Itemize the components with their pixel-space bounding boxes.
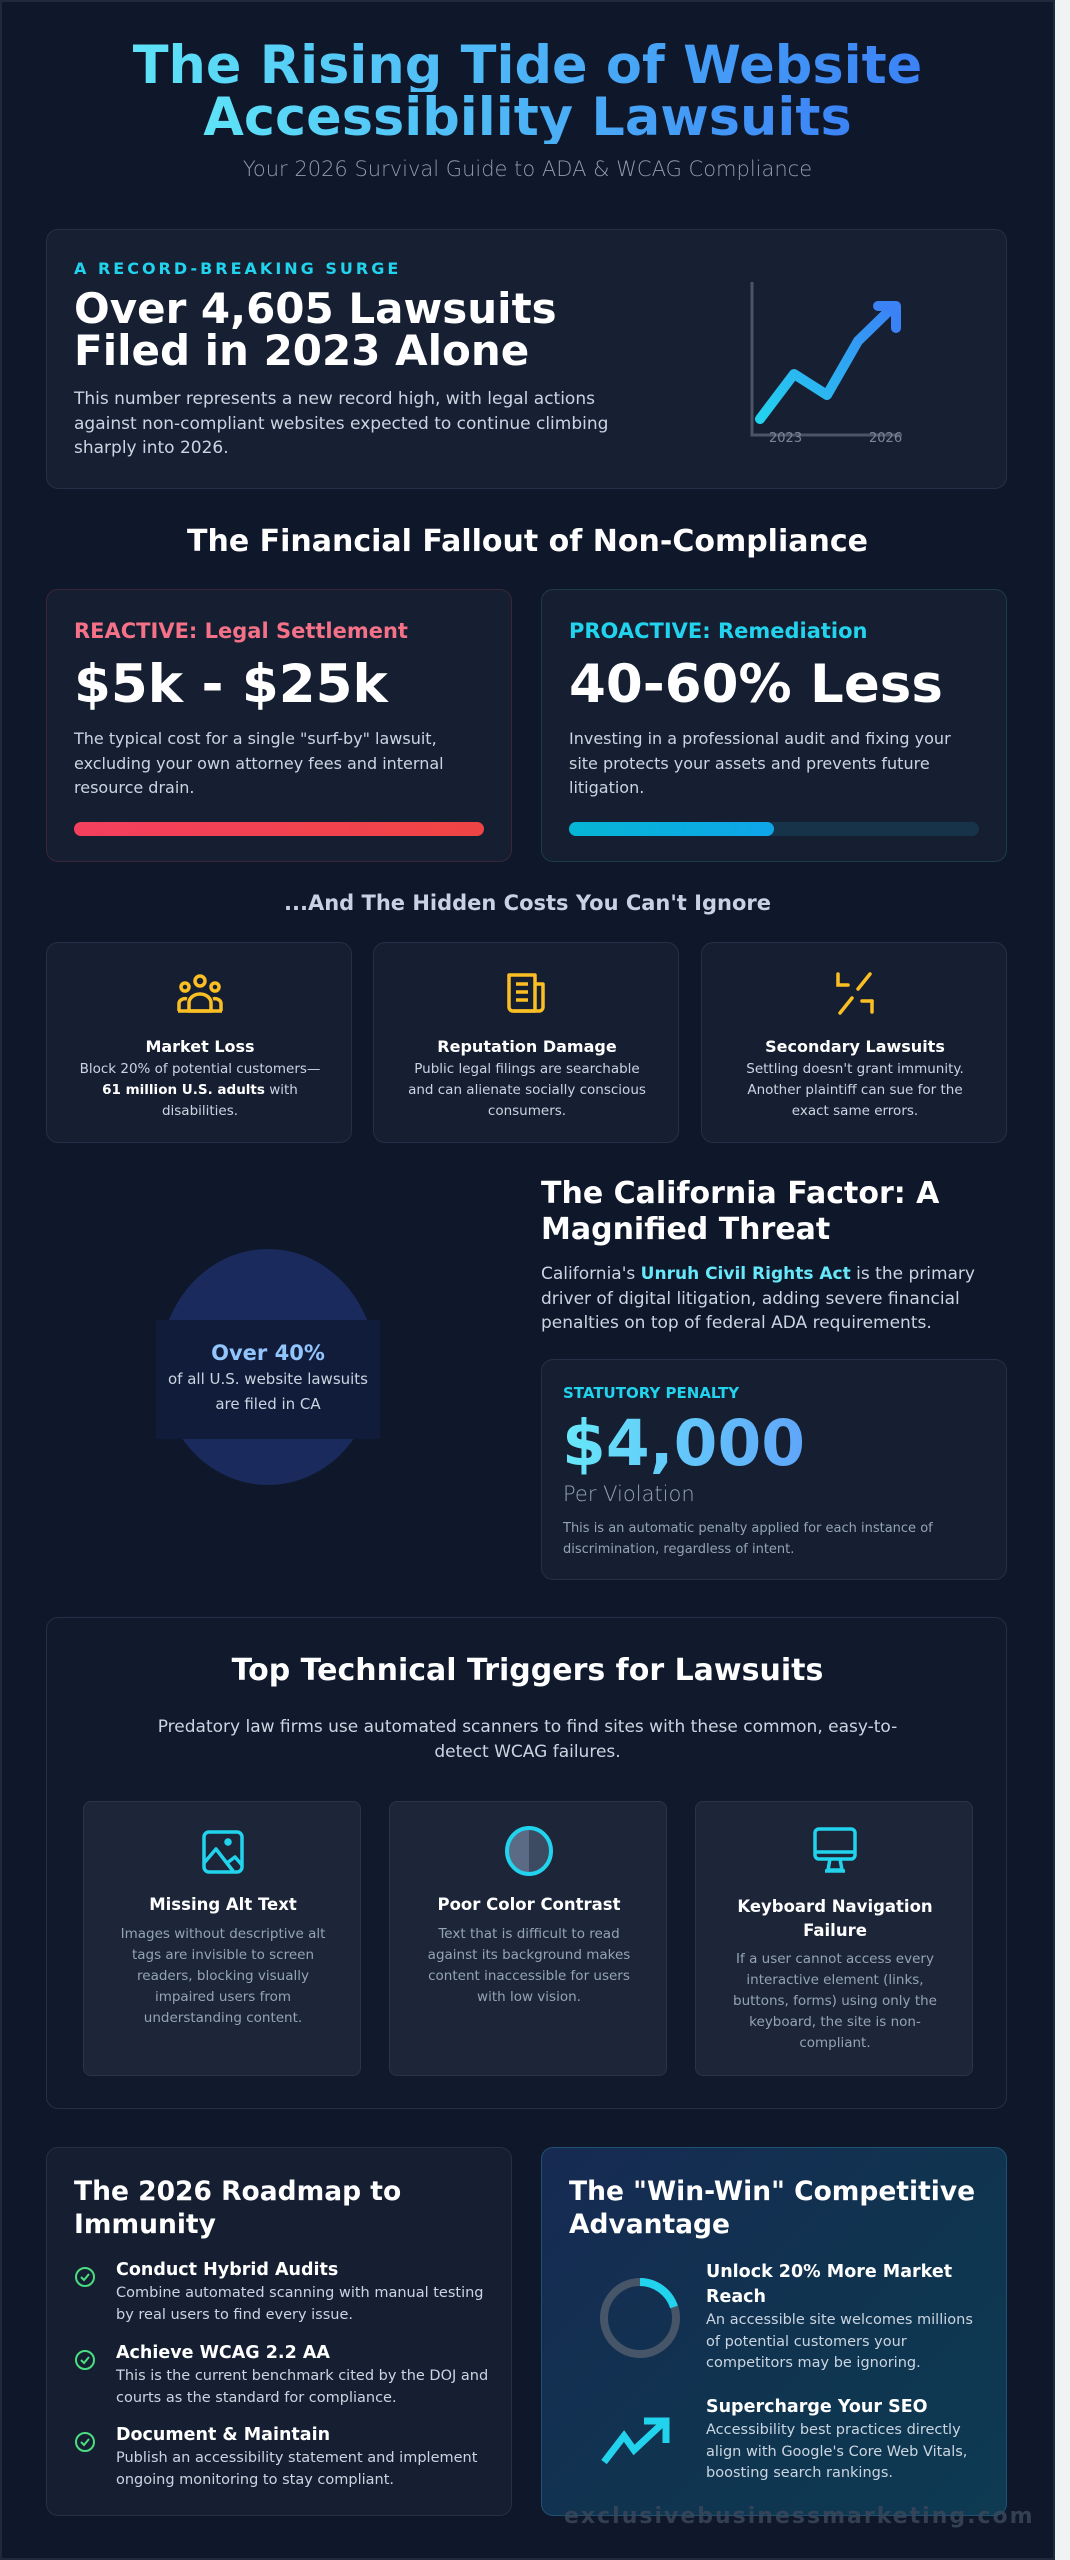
panel: reputation damage	[373, 942, 679, 1143]
text: alt desc: Images without descriptive alt tags are invisible to screen readers, blocking visually impaired users from understanding content.	[121, 1926, 325, 2026]
heading: california factor: The California Factor: A Magnified Threat	[541, 1176, 939, 1247]
chart: rising line: 2023	[769, 431, 802, 446]
icon: people	[177, 974, 223, 1013]
title	[133, 35, 922, 148]
item: hybrid audits	[75, 2260, 484, 2322]
text: market loss: Block 20% of potential customers— 61 million U.S. adults with disabilities.	[80, 1061, 320, 1119]
watermark: exclusivebusinessmarketing.com	[564, 2504, 1035, 2529]
item: document: Document & Maintain	[116, 2425, 330, 2445]
text: unruh act: California's Unruh Civil Rights Act is the primary driver of digital litigation, adding severe financial penalties on top of federal ADA requirements.	[541, 1264, 975, 1333]
icon: newspaper	[507, 973, 545, 1013]
item: hybrid audits: Conduct Hybrid Audits	[116, 2260, 338, 2280]
item: market reach: Unlock 20% More Market Reach	[706, 2262, 952, 2307]
title: keyboard: Failure	[803, 1921, 867, 1940]
graphic: CA circle	[156, 1249, 380, 1485]
card: contrast	[389, 1801, 667, 2076]
heading: hidden costs: ...And The Hidden Costs You Can't Ignore	[284, 891, 771, 915]
icon: ring	[600, 2278, 680, 2358]
item: market reach: An accessible site welcomes millions of potential customers your competitors may be ignoring.	[706, 2312, 973, 2371]
text: per violation: Per Violation	[563, 1482, 695, 1506]
text: reputation: Public legal filings are searchable and can alienate socially conscious consumers.	[408, 1061, 646, 1119]
item: wcag 2.2	[75, 2343, 488, 2406]
title: secondary: Secondary Lawsuits	[765, 1037, 945, 1056]
heading: win-win: Advantage	[569, 2209, 730, 2240]
panel: reactive	[46, 589, 512, 862]
panel: record surge	[46, 229, 1007, 489]
chart: rising line: 2026	[869, 431, 902, 446]
heading: financial fallout: The Financial Fallout of Non-Compliance	[187, 524, 868, 559]
title: keyboard: Keyboard Navigation	[737, 1897, 933, 1916]
icon: contrast circle	[505, 1826, 553, 1876]
text: secondary: Settling doesn't grant immunity. Another plaintiff can sue for the exact same errors.	[746, 1061, 964, 1119]
title: contrast: Poor Color Contrast	[437, 1895, 621, 1914]
heading: lawsuits count	[74, 284, 557, 375]
title: missing alt: Missing Alt Text	[149, 1895, 297, 1914]
panel: proactive	[541, 589, 1007, 862]
item: seo: Accessibility best practices directly align with Google's Core Web Vitals, boosting search rankings.	[706, 2422, 967, 2481]
card: keyboard	[695, 1801, 973, 2076]
stat: over 40%	[168, 1341, 368, 1413]
heading: lawsuits count: Over 4,605 Lawsuits	[74, 284, 557, 333]
heading: lawsuits count: Filed in 2023 Alone	[74, 326, 529, 375]
icon: broken link	[836, 972, 874, 1015]
card: alt text	[83, 1801, 361, 2076]
value: $4,000: $4,000	[562, 1407, 805, 1480]
item: hybrid audits: Combine automated scanning with manual testing by real users to find every issue.	[116, 2285, 484, 2322]
title: reputation: Reputation Damage	[437, 1037, 617, 1056]
title: market loss: Market Loss	[145, 1037, 255, 1056]
text: cost desc: The typical cost for a single "surf-by" lawsuit, excluding your own attorney fees and internal resource drain.	[74, 729, 444, 797]
text: penalty desc: This is an automatic penalty applied for each instance of discrimination, regardless of intent.	[563, 1521, 933, 1557]
heading: roadmap: Immunity	[74, 2209, 216, 2240]
label: proactive: PROACTIVE: Remediation	[569, 619, 868, 643]
value: percent less: 40-60% Less	[569, 654, 943, 715]
label: record-breaking: A RECORD-BREAKING SURGE	[74, 259, 401, 278]
stat: over 40%: Over 40%	[211, 1341, 325, 1365]
subtitle: Your 2026 Survival Guide to ADA & WCAG Compliance	[243, 157, 812, 181]
item: market reach	[706, 2262, 973, 2371]
chart: rising line	[750, 282, 902, 446]
heading: roadmap	[74, 2176, 401, 2240]
heading: triggers: Top Technical Triggers for Lawsuits	[232, 1653, 823, 1688]
item: wcag 2.2: This is the current benchmark cited by the DOJ and courts as the standard for compliance.	[116, 2368, 488, 2406]
icon: image	[202, 1830, 244, 1874]
title: Accessibility Lawsuits	[203, 87, 852, 148]
panel: secondary lawsuits	[701, 942, 1007, 1143]
heading: win-win	[569, 2176, 975, 2240]
item: wcag 2.2: Achieve WCAG 2.2 AA	[116, 2343, 330, 2363]
text: contrast desc: Text that is difficult to read against its background makes content inaccessible for users with low vision.	[428, 1926, 630, 2005]
icon: monitor	[813, 1827, 857, 1873]
label: statutory penalty: STATUTORY PENALTY	[563, 1384, 739, 1402]
panel: market loss	[46, 942, 352, 1143]
panel: statutory penalty	[541, 1359, 1007, 1580]
panel: roadmap	[46, 2147, 512, 2516]
bar: full red	[74, 822, 484, 836]
text: keyboard desc: If a user cannot access every interactive element (links, buttons, forms) using only the keyboard, the site is non-compliant.	[733, 1951, 937, 2051]
panel: win-win	[541, 2147, 1007, 2516]
title: keyboard	[737, 1897, 933, 1940]
stat: over 40%: of all U.S. website lawsuits	[168, 1370, 368, 1388]
icon: trend arrow	[601, 2418, 670, 2464]
value: cost range: $5k - $25k	[74, 654, 388, 715]
text: investing: Investing in a professional audit and fixing your site protects your assets and prevents future litigation.	[569, 729, 951, 797]
item: document	[75, 2425, 478, 2488]
text: predatory firms: Predatory law firms use automated scanners to find sites with these common, easy-to-detect WCAG failures.	[158, 1717, 897, 1762]
text: record high: This number represents a new record high, with legal actions against non-compliant websites expected to continue climbing sharply into 2026.	[74, 389, 608, 458]
item: document: Publish an accessibility statement and implement ongoing monitoring to stay compliant.	[116, 2450, 477, 2488]
bar: half blue	[569, 822, 979, 836]
label: reactive: REACTIVE: Legal Settlement	[74, 619, 408, 643]
stat: over 40%: are filed in CA	[215, 1395, 321, 1413]
panel: technical triggers	[46, 1617, 1007, 2109]
heading: win-win: The "Win-Win" Competitive	[569, 2176, 975, 2207]
heading: roadmap: The 2026 Roadmap to	[74, 2176, 401, 2207]
item: seo: Supercharge Your SEO	[706, 2397, 928, 2417]
title: The Rising Tide of Website	[133, 35, 922, 96]
